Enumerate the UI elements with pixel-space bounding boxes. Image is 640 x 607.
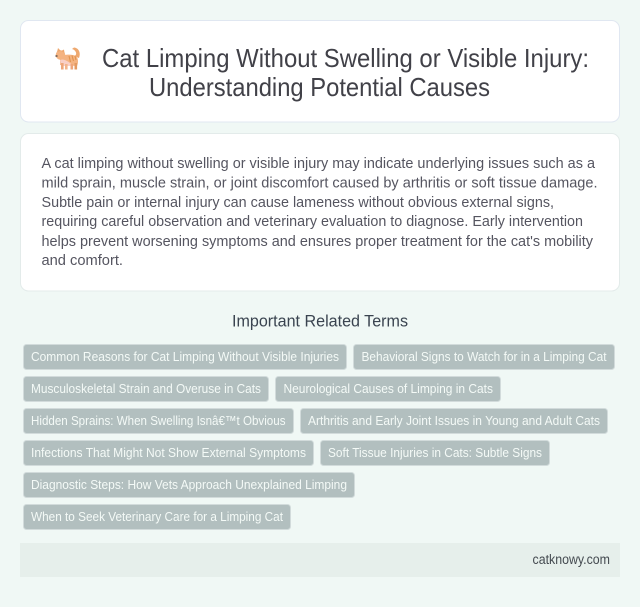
tag: common reasons (24, 344, 346, 370)
footer source: catknowy.com (532, 552, 610, 567)
summary paragraph: requiring careful observation and veterinary evaluation to diagnose. Early intervention (42, 213, 583, 230)
tag: common reasons: Common Reasons for Cat Limping Without Visible Injuries (31, 349, 339, 364)
panel: related term tags (24, 344, 614, 530)
summary paragraph: and comfort. (42, 252, 123, 269)
tag: infections (24, 440, 314, 466)
tag: neurological causes: Neurological Causes of Limping in Cats (284, 381, 493, 396)
tag: diagnostic steps (24, 472, 354, 498)
panel: summary text (20, 134, 620, 291)
tag: musculoskeletal strain: Musculoskeletal Strain and Overuse in Cats (31, 381, 261, 396)
title line 1: Cat Limping Without Swelling or Visible Injury: (102, 43, 589, 73)
tag: behavioral signs: Behavioral Signs to Watch for in a Limping Cat (362, 349, 607, 364)
tag: arthritis: Arthritis and Early Joint Issues in Young and Adult Cats (308, 413, 600, 428)
summary paragraph: helps prevent worsening symptoms and ensures proper treatment for the cat's mobility (42, 233, 593, 250)
summary paragraph (42, 155, 598, 269)
tag: when to seek care (24, 504, 290, 530)
tag: hidden sprains: Hidden Sprains: When Swelling Isnâ€™t Obvious (31, 413, 286, 428)
tag: arthritis (300, 408, 608, 434)
tag: infections: Infections That Might Not Show External Symptoms (31, 445, 306, 460)
title line 2: Understanding Potential Causes (149, 72, 490, 102)
summary paragraph: A cat limping without swelling or visible injury may indicate underlying issues such as a (42, 155, 596, 172)
tag: neurological causes (276, 376, 500, 402)
icon: orange cat (56, 48, 80, 70)
summary paragraph: Subtle pain or internal injury can cause lameness without obvious external signs, (42, 194, 554, 211)
tag: behavioral signs (354, 344, 614, 370)
heading: important related terms: Important Related Terms (232, 312, 408, 330)
footer bar (20, 543, 620, 577)
tag: musculoskeletal strain (24, 376, 268, 402)
summary paragraph: mild sprain, muscle strain, or joint discomfort caused by arthritis or soft tissue damage. (42, 174, 598, 192)
tag: soft tissue injuries (320, 440, 550, 466)
tag: diagnostic steps: Diagnostic Steps: How Vets Approach Unexplained Limping (31, 477, 347, 492)
tag: when to seek care: When to Seek Veterinary Care for a Limping Cat (31, 509, 283, 524)
tag: hidden sprains (24, 408, 294, 434)
tag: soft tissue injuries: Soft Tissue Injuries in Cats: Subtle Signs (328, 445, 542, 460)
panel: title card (20, 20, 620, 122)
